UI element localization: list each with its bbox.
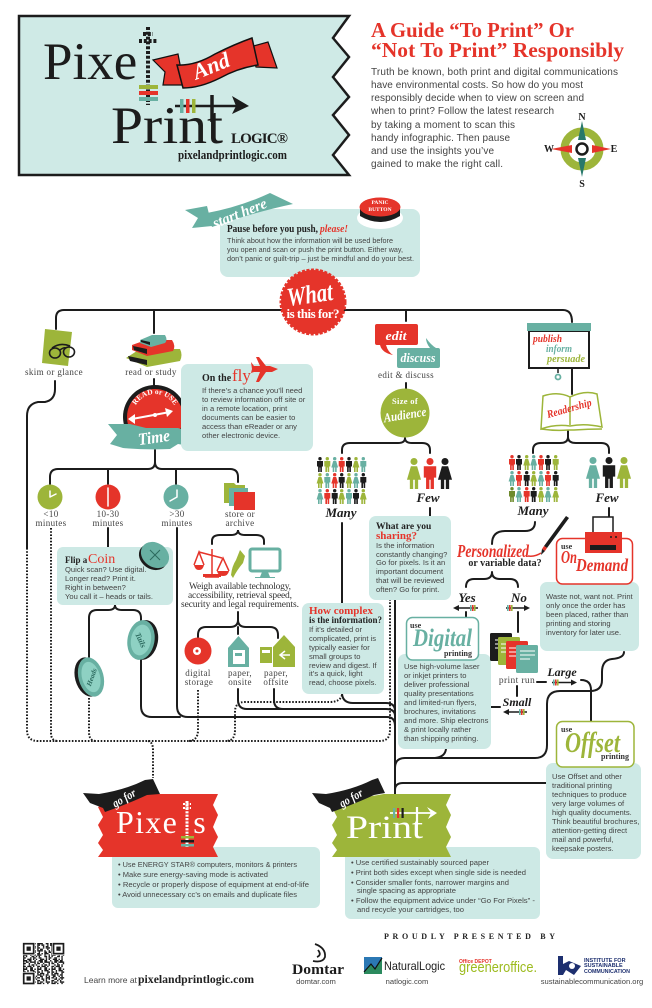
panel: what are you sharing: Is the information — [376, 541, 434, 550]
logo: Institute for Sustainable Communication: INSTITUTE FOR — [584, 958, 626, 964]
panel: what are you sharing: important document — [376, 567, 444, 576]
panel: use offset printing: mail and powerful, — [552, 835, 614, 844]
panel: on the fly: documents can be easier to — [202, 413, 295, 422]
panel: use offset printing: high quality documents. — [552, 808, 632, 817]
flow lines — [27, 310, 624, 795]
label: read or study: read or study — [125, 367, 177, 377]
badge: go for pixels: go for — [109, 786, 139, 811]
panel: use digital printing: and limited-run flyers, — [404, 698, 477, 707]
label: under 10 minutes — [36, 509, 67, 528]
panel: go for pixels tips: • Use ENERGY STAR® computers, monitors & printers — [118, 860, 297, 869]
icon: compass: S — [579, 179, 585, 190]
panel: use offset printing: attention-getting direct — [552, 826, 628, 835]
panel: how complex: How complex — [309, 605, 373, 617]
badge: read or use time: READ or USE — [132, 390, 178, 406]
icon: coin tails: Tails — [133, 631, 148, 649]
panel: go for print tips: • Consider smaller fonts, narrower margins and — [351, 878, 509, 887]
logo: Institute for Sustainable Communication: sustainablecommunication.org — [541, 977, 643, 986]
panel: on the fly: other electronic device. — [202, 431, 280, 440]
text: weigh available technology — [181, 582, 299, 610]
badge: what is this for — [281, 270, 345, 334]
icon: compass: W — [544, 144, 554, 155]
label: under 10 minutes: minutes — [36, 518, 67, 528]
panel: use digital printing: and more. Ship electrons — [404, 716, 489, 725]
panel: how complex: it’s a quick, light — [309, 669, 363, 678]
panel: go for print tips: • Use certified sustainably sourced paper — [351, 858, 489, 867]
panel: what are you sharing: constantly changing? — [376, 550, 447, 559]
intro text: Truth be known, both print and digital communications — [371, 67, 618, 78]
panel: flip a coin: Right in between? — [65, 583, 126, 592]
icon: compass: E — [611, 144, 618, 155]
icon: stack of books — [126, 335, 182, 367]
icon: printer — [585, 517, 622, 553]
logo: Office Depot greener office: greeneroffice. — [459, 959, 537, 976]
panel: use offset printing: techniques to produce — [552, 790, 627, 799]
panel: flip a coin: Quick scan? Use digital. — [65, 565, 146, 574]
intro text: responsibly decide when to view on screen and — [371, 93, 584, 104]
panel: use digital printing: printing — [444, 649, 472, 658]
heading: personalized or variable data — [456, 541, 542, 569]
label: paper offsite — [263, 668, 289, 687]
label: store or archive: archive — [226, 518, 254, 528]
label: many: Many — [324, 505, 357, 520]
panel: use on demand: printing and storing — [546, 619, 611, 628]
label: paper onsite: onsite — [228, 677, 252, 687]
panel: what are you sharing: sharing? — [376, 530, 417, 542]
icon: digital storage disc — [184, 638, 212, 664]
panel: on the fly: fly — [232, 366, 251, 385]
logo: Natural Logic: natlogic.com — [386, 977, 428, 986]
panel: on the fly: to review information off site or — [202, 395, 306, 404]
icon: panic button: BUTTON — [368, 207, 392, 213]
logo word: Logic: LOGIC® — [231, 131, 288, 147]
panel: flip a coin: Flip a — [65, 555, 88, 565]
badge: what is this for: is this for? — [286, 306, 340, 321]
icon: clock under 10 minutes — [38, 484, 62, 510]
start here text: don’t panic or guilt-trip – just be mindful and do your best. — [227, 254, 414, 263]
logo: Domtar: domtar.com — [296, 977, 336, 986]
label: paper offsite: offsite — [263, 677, 289, 687]
decision: large arrow: Large — [546, 665, 577, 679]
icon: clock 10-30 minutes — [96, 484, 120, 510]
QR code — [22, 942, 65, 985]
badge: what is this for: What — [285, 277, 335, 312]
badge: go for print: Print — [346, 810, 423, 846]
logo word: Print with arrow: Print — [111, 97, 223, 155]
people group: few (audience) — [407, 458, 452, 489]
icon: compass — [544, 112, 618, 190]
panel: use offset printing: Use Offset and other — [552, 772, 622, 781]
label: few readers: Few — [594, 490, 619, 505]
logo: Natural Logic — [364, 957, 445, 986]
panel: flip a coin: You call it – heads or tails. — [65, 592, 153, 601]
panel: flip a coin — [57, 537, 174, 605]
panel: use digital printing: or inkjet printers to — [404, 671, 466, 680]
panel: how complex: review and digest. If — [309, 661, 377, 670]
logo: Institute for Sustainable Communication: SUSTAINABLE — [584, 963, 623, 969]
panel: use on demand: inventory for later use. — [546, 628, 621, 637]
icon: coin heads: Heads — [85, 667, 99, 688]
icon: presentation board — [527, 323, 591, 380]
panel: use on demand — [540, 538, 639, 651]
panel: on the fly: in a remote location, print — [202, 404, 288, 413]
badge: go for pixels — [83, 779, 218, 857]
title: A Guide “To Print” Or — [371, 18, 574, 42]
logo: Domtar — [292, 944, 344, 986]
icon: coin tails — [124, 618, 161, 662]
panel: use on demand: only once the order has — [546, 601, 626, 610]
heading: personalized or variable data: or variable data? — [468, 558, 542, 569]
icon: presentation board: inform — [546, 344, 572, 355]
panel: go for print tips: single spacing as appropriate — [357, 886, 456, 895]
icon: folders — [224, 483, 255, 510]
panel: use offset printing: Offset — [565, 727, 621, 759]
intro text — [370, 67, 618, 170]
people group: many (readership) — [509, 455, 559, 502]
panel: what are you sharing: often? Go for print. — [376, 585, 439, 594]
panel: how complex: small groups to — [309, 652, 360, 661]
icon: panic button — [357, 198, 403, 229]
icon: edit and discuss bubbles: discuss — [400, 350, 436, 365]
panel: use on demand: been placed, rather than — [546, 610, 628, 619]
icon: coin heads — [70, 654, 108, 700]
intro text: when to print? Follow the latest research — [370, 106, 554, 117]
people group: many (audience) — [317, 457, 367, 504]
panel: on the fly — [181, 357, 313, 451]
panel: go for print tips — [345, 847, 540, 919]
panel: what are you sharing — [369, 516, 451, 600]
panel: on the fly: On the — [202, 373, 232, 384]
icon: print run documents — [490, 633, 538, 673]
panel: what are you sharing: What are you — [376, 522, 432, 532]
icon: paper onsite — [228, 636, 249, 667]
label: print run: print run — [499, 676, 535, 686]
label: edit and discuss: edit & discuss — [378, 370, 434, 380]
panel: what are you sharing: that will be reviewed — [376, 576, 444, 585]
decision: small arrow — [503, 695, 532, 715]
icon: tossed coin — [134, 537, 174, 575]
badge: read or use time — [108, 385, 181, 450]
panel: use offset printing: use — [561, 725, 573, 734]
icon: edit and discuss bubbles: edit — [386, 328, 407, 343]
label: over 30 minutes: >30 — [169, 509, 185, 519]
presented by: PROUDLY PRESENTED BY — [384, 932, 555, 941]
label: under 10 minutes: <10 — [43, 509, 59, 519]
logo: Institute for Sustainable Communication: COMMUNICATION — [584, 969, 630, 975]
intro text: and use the insights you’ve — [371, 146, 494, 157]
label: paper offsite: paper, — [264, 668, 288, 678]
panel: use digital printing: deliver professional — [404, 680, 470, 689]
decision: large arrow — [546, 665, 577, 686]
icon: airplane — [251, 357, 278, 382]
label: few: Few — [415, 490, 440, 505]
panel: use digital printing: than shipping printing. — [404, 734, 478, 743]
start here text: Think about how the information will be used before — [227, 236, 393, 245]
badge: go for pixels: Pixels — [116, 804, 207, 840]
panel: use digital printing — [398, 618, 491, 749]
icon: readership book — [541, 393, 602, 430]
panel: how complex — [302, 603, 384, 694]
text: weigh available technology: accessibility, retrieval speed, — [188, 591, 292, 601]
intro text: gained to make the right call. — [371, 159, 503, 170]
panel: how complex: If it’s detailed or — [309, 625, 363, 634]
start here text — [227, 223, 414, 263]
logo url: pixelandprintlogic.com — [178, 148, 288, 162]
panel: flip a coin: Longer read? Print it. — [65, 574, 136, 583]
label: 10-30 minutes — [93, 509, 124, 528]
panel: what are you sharing: Go for pixels. Is it an — [376, 558, 445, 567]
panel: start here — [185, 193, 420, 277]
label: over 30 minutes — [162, 509, 193, 528]
panel: use on demand: On — [561, 547, 577, 567]
badge: go for print: go for — [336, 786, 366, 811]
title — [371, 18, 625, 62]
panel: on the fly: access than eReader or any — [202, 422, 297, 431]
panel: use offset printing: traditional printing — [552, 781, 612, 790]
label: store or archive — [225, 509, 255, 528]
panel: use digital printing: use — [410, 621, 422, 630]
red And banner — [153, 38, 277, 88]
start here ribbon — [185, 193, 293, 232]
icon: clock over 30 minutes — [164, 484, 188, 510]
start here text: Pause before you push, — [227, 224, 318, 235]
heading: personalized or variable data: Personalized — [456, 541, 530, 561]
panel: flip a coin: Coin — [88, 552, 115, 567]
panel: how complex: complicated, print is — [309, 634, 376, 643]
label: store or archive: store or — [225, 509, 255, 519]
intro text: handy infographic. Then pause — [371, 133, 510, 144]
icon: edit and discuss bubbles — [375, 324, 440, 368]
panel: use offset printing: very large volumes of — [552, 799, 625, 808]
panel: how complex: read, choose pixels. — [309, 678, 377, 687]
learn more line — [84, 972, 254, 986]
decision: small arrow: Small — [503, 695, 532, 709]
logo word: Pixel: Pixel — [43, 33, 152, 91]
panel: how complex: typically easier for — [309, 643, 370, 652]
panel: use offset printing — [546, 722, 641, 859]
label: over 30 minutes: minutes — [162, 518, 193, 528]
logo: Domtar: Domtar — [292, 962, 344, 978]
text: weigh available technology: Weigh available technology, — [189, 582, 291, 592]
label: 10-30 minutes: minutes — [93, 518, 124, 528]
start here text: you open and scan or push the print button. Either way, — [227, 245, 403, 254]
start here ribbon: start here — [210, 196, 270, 232]
icon: scales plug monitor — [194, 549, 280, 578]
learn more line: Learn more at — [84, 975, 138, 985]
icon: paper offsite — [260, 635, 295, 667]
logo: Natural Logic: NaturalLogic — [384, 959, 445, 973]
people group: few (readership) — [586, 457, 631, 488]
icon: skim book and glasses — [42, 329, 74, 366]
badge: go for print — [312, 778, 451, 857]
panel: use on demand: Demand — [575, 555, 629, 575]
panel: go for print tips: • Print both sides except when single side is needed — [351, 868, 526, 877]
panel: use on demand: Waste not, want not. Print — [546, 592, 634, 601]
icon: compass: N — [578, 112, 586, 123]
label: digital storage: storage — [185, 677, 213, 687]
panel: use offset printing: printing — [601, 752, 629, 761]
panel: how complex: is the information? — [309, 615, 382, 625]
panel: go for pixels tips — [112, 847, 320, 908]
badge: read or use time: Time — [137, 426, 172, 449]
panel: go for pixels tips: • Avoid unnecessary cc’s on emails and duplicate files — [118, 890, 297, 899]
label: skim or glance: skim or glance — [25, 367, 83, 377]
label: digital storage: digital — [185, 668, 211, 678]
panel: go for pixels tips: • Make sure energy-saving mode is activated — [118, 870, 268, 879]
decision: no arrow: No — [510, 590, 527, 605]
panel: use digital printing: brochures, invitations — [404, 707, 476, 716]
logo: Office Depot greener office: Office DEPOT — [459, 959, 492, 965]
icon: presentation board: persuade — [546, 354, 585, 365]
icon: presentation board: publish — [532, 334, 562, 345]
text: weigh available technology: security and legal requirements. — [181, 600, 299, 610]
decision: yes arrow — [453, 590, 478, 611]
panel: use digital printing: & print locally rather — [404, 725, 472, 734]
panel: go for pixels tips: • Recycle or properly dispose of equipment at end-of-life — [118, 880, 309, 889]
badge: size of audience: Size of — [392, 396, 418, 406]
decision: yes arrow: Yes — [458, 590, 476, 605]
logo: Institute for Sustainable Communication — [541, 956, 643, 986]
panel: use digital printing: Digital — [412, 625, 472, 652]
icon: pen — [541, 516, 569, 555]
panel: on the fly: If there’s a chance you’ll need — [202, 386, 302, 395]
decision: no arrow — [506, 590, 530, 611]
label: paper onsite: paper, — [228, 668, 252, 678]
label: digital storage — [185, 668, 213, 687]
panel: use digital printing: Use high-volume laser — [404, 662, 480, 671]
label: paper onsite — [228, 668, 252, 687]
intro text: by taking a moment to scan this — [371, 120, 515, 131]
panel: use digital printing: quality presentations — [404, 689, 474, 698]
header logo panel — [19, 16, 349, 175]
panel: use on demand: use — [561, 542, 573, 551]
logo dotted pixel column — [139, 27, 158, 105]
panel: go for print tips: and recycle your cartridges, too — [357, 905, 464, 914]
label: many readers: Many — [516, 503, 549, 518]
learn more line: pixelandprintlogic.com — [138, 972, 254, 986]
badge: size of audience — [380, 388, 430, 438]
panel: go for print tips: • Follow the equipment advice under “Go For Pixels” - — [351, 896, 535, 905]
badge: size of audience: Audience — [382, 404, 428, 425]
red And banner: And — [187, 47, 234, 85]
intro text: have environmental costs. So how do you most — [371, 80, 583, 91]
icon: readership book: Readership — [545, 397, 593, 421]
label: 10-30 minutes: 10-30 — [97, 509, 120, 519]
panel: use offset printing: keepsake posters. — [552, 844, 614, 853]
icon: panic button: PANIC — [371, 200, 389, 206]
start here text: please! — [319, 223, 348, 235]
panel: use offset printing: Think beautiful brochures, — [552, 817, 639, 826]
title: “Not To Print” Responsibly — [371, 38, 625, 62]
